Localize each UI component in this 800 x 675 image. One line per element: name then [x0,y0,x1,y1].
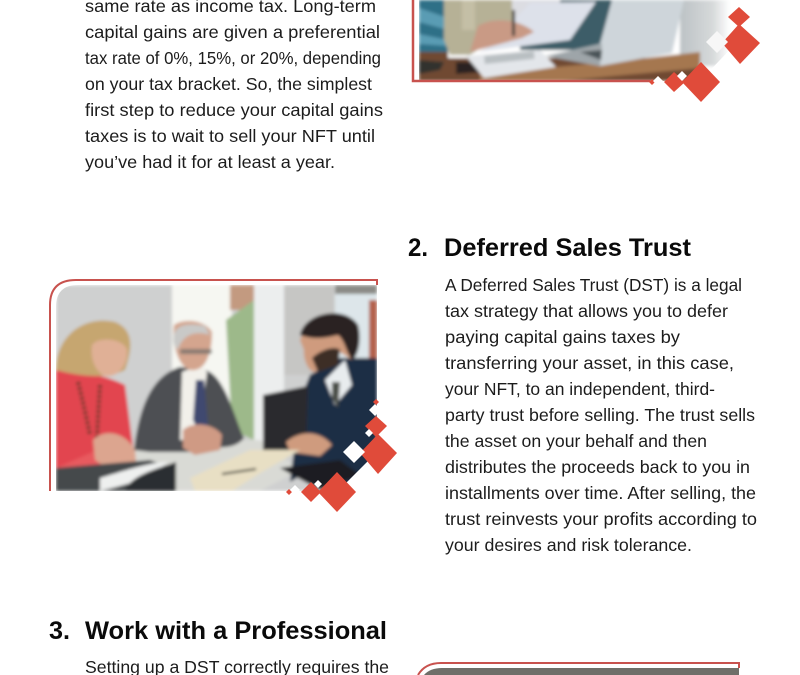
text block: long-term capital gains: first step to reduce your capital gains [85,100,383,120]
text block: Deferred Sales Trust explanation: installments over time. After selling, the [445,483,756,503]
diamond accents [286,399,397,512]
text block: Deferred Sales Trust explanation: paying capital gains taxes by [445,327,680,347]
photo: three people meeting at a table [50,280,397,512]
text block: Deferred Sales Trust explanation: transferring your asset, in this case, [445,353,734,373]
text block: Deferred Sales Trust explanation: party trust before selling. The trust sells [445,405,755,425]
heading: Deferred Sales Trust: Deferred Sales Trust [444,234,692,262]
text block: long-term capital gains: on your tax bracket. So, the simplest [85,74,372,94]
text block: Deferred Sales Trust explanation: your NFT, to an independent, third- [445,379,715,399]
text block: long-term capital gains: taxes is to wait to sell your NFT until [85,126,375,146]
text block: long-term capital gains [85,0,383,172]
text block: long-term capital gains: tax rate of 0%, 15%, or 20%, depending [85,48,381,68]
text block: Deferred Sales Trust explanation: A Deferred Sales Trust (DST) is a legal [445,275,742,295]
heading: Deferred Sales Trust: 2. [408,234,428,262]
heading: Work with a Professional: Work with a Professional [85,617,387,645]
text block: Deferred Sales Trust explanation [445,275,757,555]
text block: Deferred Sales Trust explanation: trust reinvests your profits according to [445,509,757,529]
text block: long-term capital gains: capital gains are given a preferential [85,22,380,42]
diamond accents [649,7,760,102]
photo: person reviewing documents at a laptop [413,0,760,102]
heading: Work with a Professional: 3. [49,617,70,645]
text block: Deferred Sales Trust explanation: distributes the proceeds back to you in [445,457,750,477]
text block: long-term capital gains: you’ve had it for at least a year. [85,152,335,172]
text block: Deferred Sales Trust explanation: the asset on your behalf and then [445,431,707,451]
text block: Deferred Sales Trust explanation: your desires and risk tolerance. [445,535,692,555]
text block: Deferred Sales Trust explanation: tax strategy that allows you to defer [445,301,728,321]
photo: third section image, top edge [418,663,739,675]
